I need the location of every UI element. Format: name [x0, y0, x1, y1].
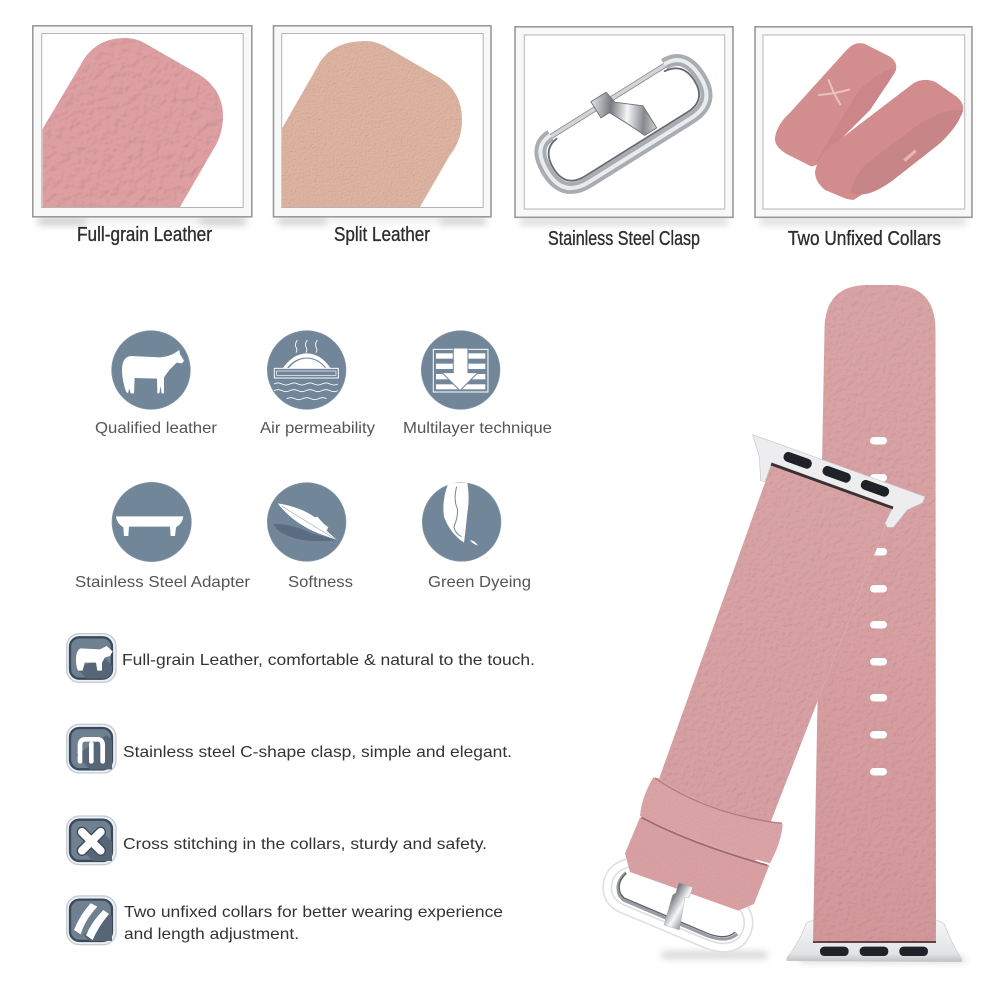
shadow beneath strap [662, 953, 965, 961]
caption: two unfixed collars: Two Unfixed Collars [788, 228, 941, 250]
feature icon: green dyeing [422, 483, 531, 591]
feature icon: stainless steel adapter: Stainless Steel Adapter [75, 574, 251, 591]
M-shaped clasp [80, 739, 103, 761]
two bands [74, 903, 97, 934]
feature icon: multilayer technique [403, 331, 552, 437]
bullet: stainless steel clasp: Stainless steel C-shape clasp, simple and elegant. [123, 744, 512, 761]
clasp bar [607, 863, 748, 948]
bullet: two unfixed collars: Two unfixed collars for better wearing experience [124, 904, 503, 921]
feature icon: air permeability: Air permeability [260, 420, 375, 437]
feature icon: qualified leather [95, 331, 218, 437]
caption: stainless steel clasp: Stainless Steel Clasp [548, 228, 700, 250]
cross [82, 832, 101, 851]
swatch: beige split leather [282, 41, 462, 207]
bullet: stainless steel clasp [67, 724, 512, 773]
tongue [664, 883, 693, 930]
caption: full-grain leather: Full-grain Leather [77, 224, 212, 246]
cow [76, 646, 113, 671]
feature icon: multilayer technique: Multilayer technique [403, 420, 552, 437]
panel: split leather swatch [274, 26, 491, 246]
strap holes [870, 437, 887, 776]
cow silhouette [122, 350, 184, 393]
top lug [753, 435, 925, 527]
feature icon: air permeability [260, 331, 375, 437]
bullet: cross stitching: Cross stitching in the collars, sturdy and safety. [123, 836, 487, 853]
right vertical strap [813, 285, 936, 942]
bullet: two unfixed collars [67, 896, 503, 945]
feature icon: green dyeing: Green Dyeing [428, 574, 531, 591]
bullet: two unfixed collars: and length adjustment. [124, 926, 299, 943]
caption: split leather: Split Leather [334, 224, 430, 246]
panel: full-grain leather swatch [33, 26, 252, 246]
upper collar [640, 777, 783, 863]
collars illustration [775, 43, 963, 200]
buckle and collars [607, 777, 783, 948]
bottom lug [787, 921, 962, 962]
left strap [630, 463, 893, 870]
bullet: cross stitching [67, 816, 487, 865]
clasp illustration [528, 46, 716, 198]
feature icon: softness: Softness [288, 574, 353, 591]
feature icon: softness [267, 483, 353, 591]
feature icon: qualified leather: Qualified leather [95, 420, 218, 437]
feature icon: stainless steel adapter [75, 482, 251, 591]
swatch: pink full-grain leather [42, 38, 223, 207]
watch strap assembly [607, 285, 965, 962]
panel: two unfixed collars [755, 27, 972, 250]
lower collar and strap end [625, 817, 769, 911]
panel: stainless steel clasp [515, 27, 733, 250]
bullet: full-grain leather: Full-grain Leather, comfortable & natural to the touch. [122, 652, 535, 669]
bullet: full-grain leather [67, 634, 535, 682]
